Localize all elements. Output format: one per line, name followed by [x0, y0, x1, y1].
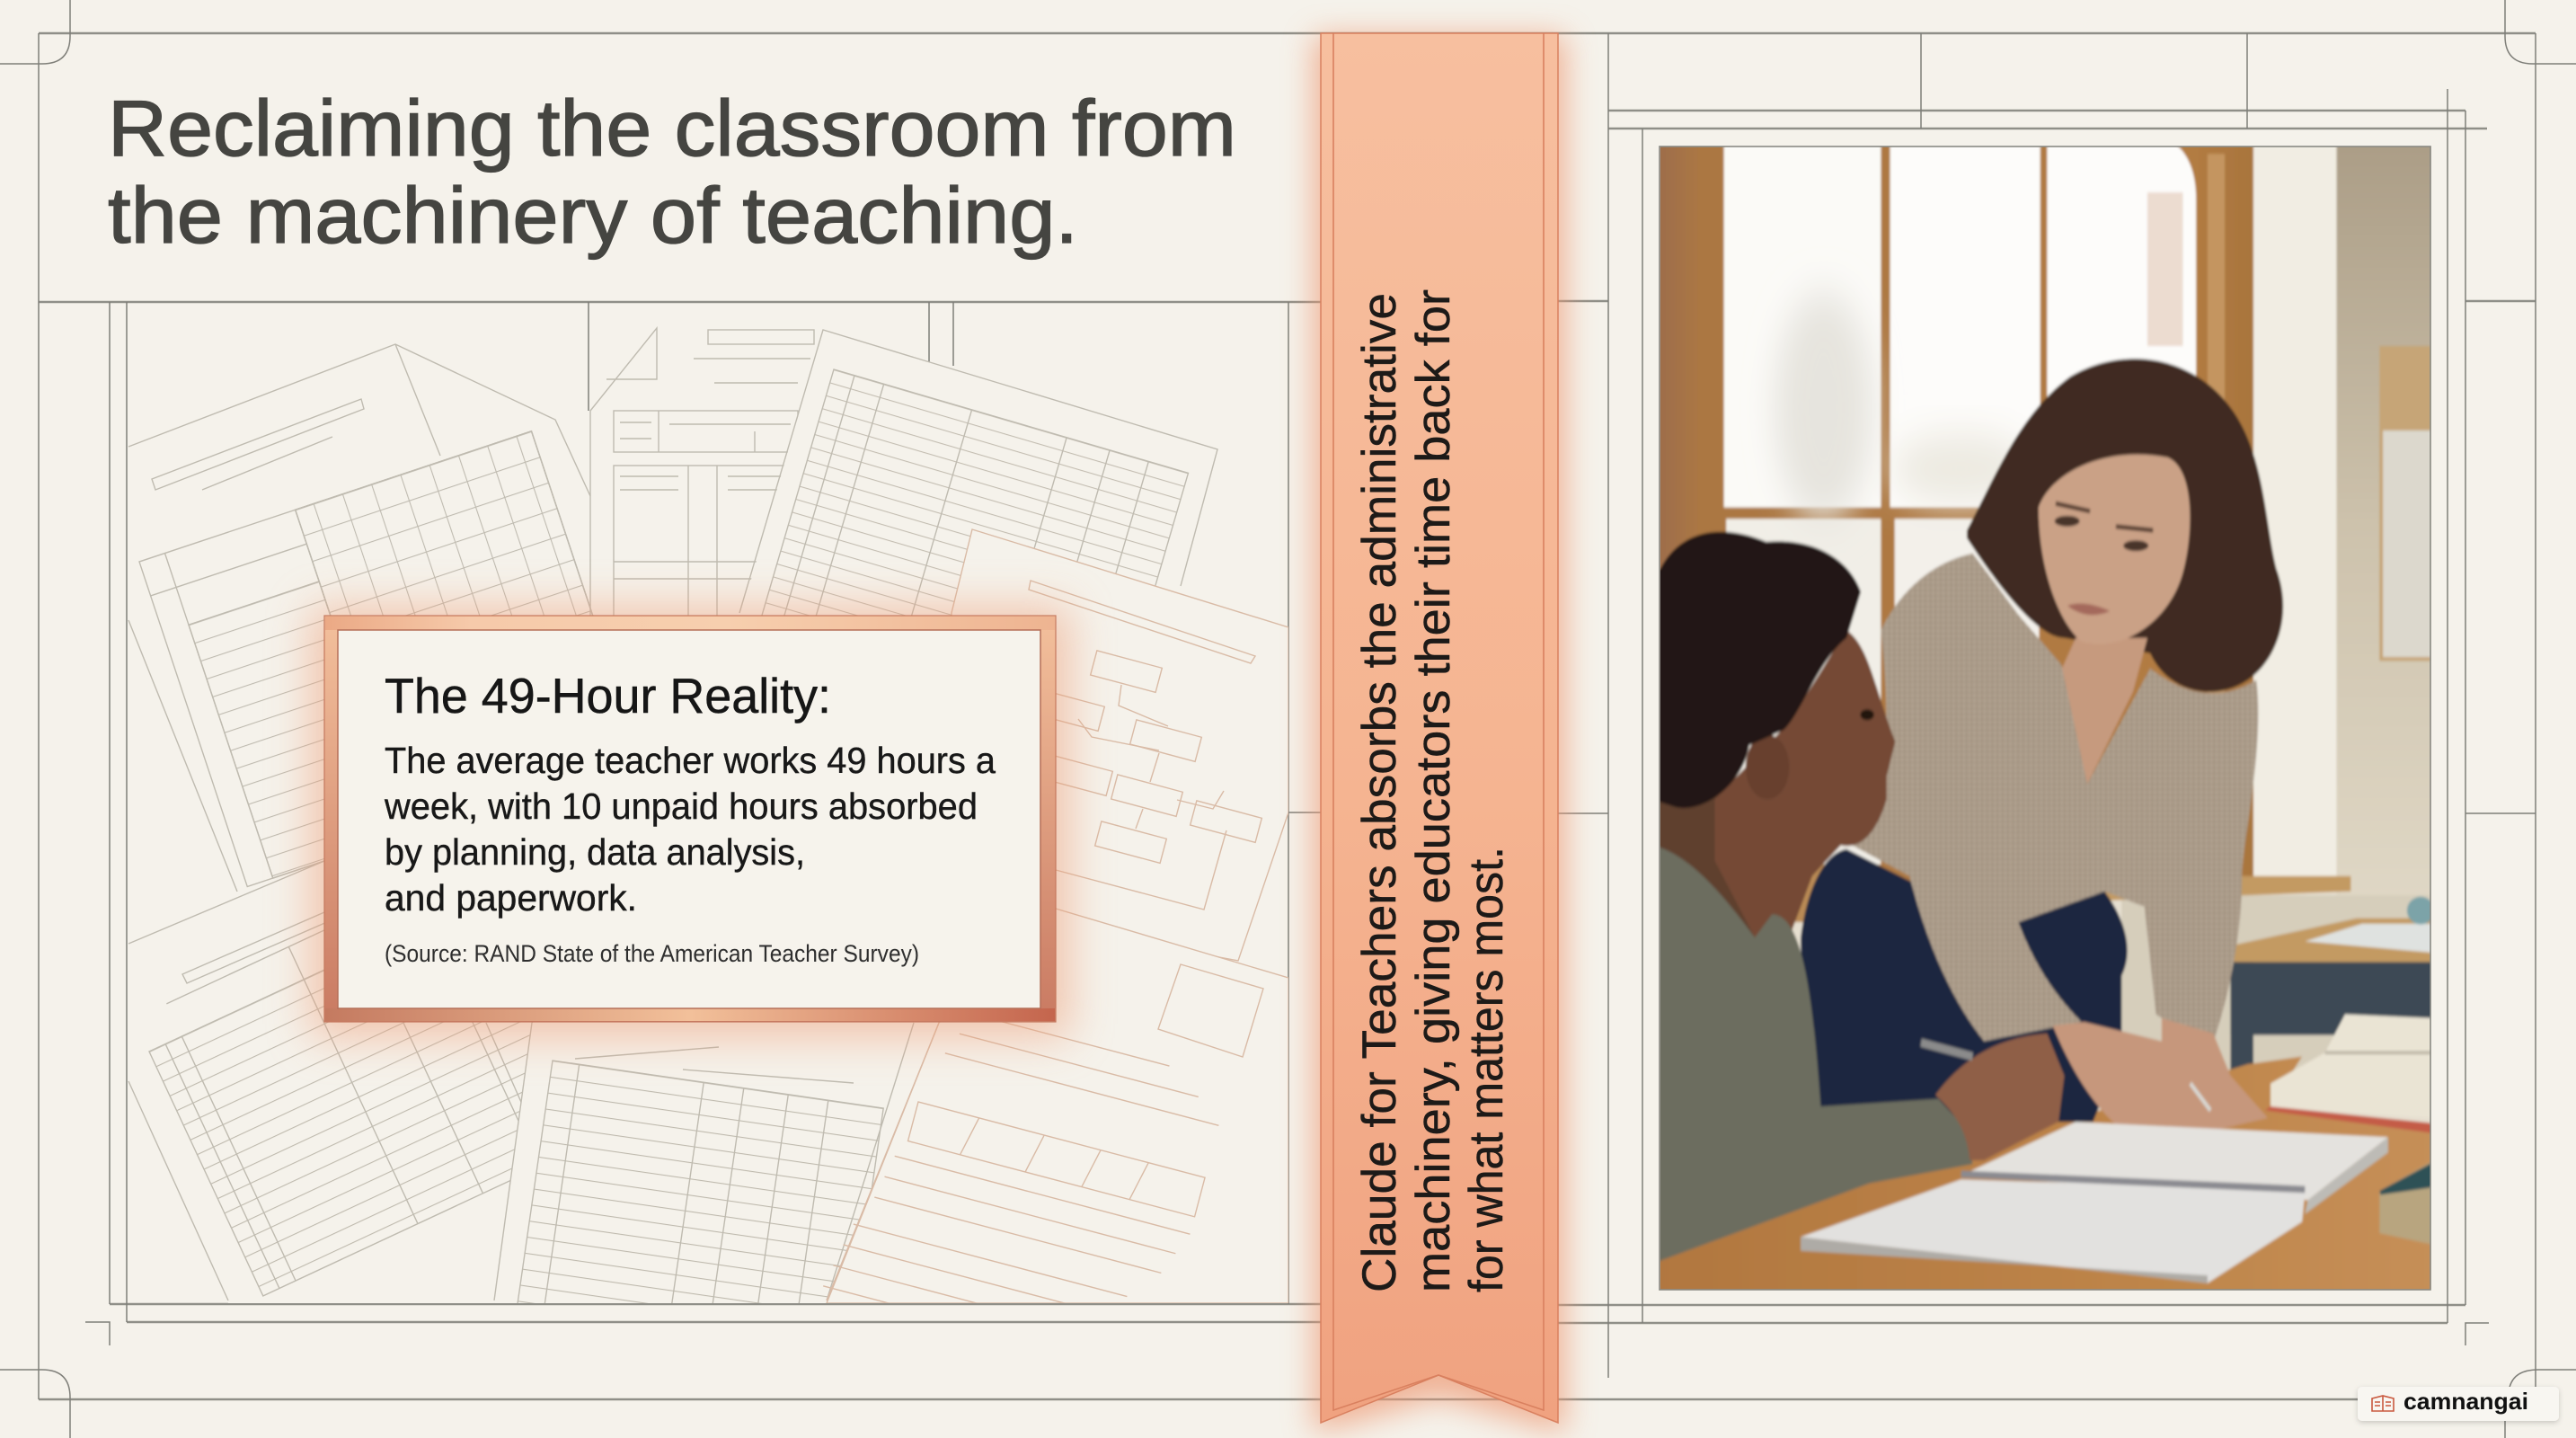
- photo teacher: [1801, 359, 2283, 1130]
- panel: overlapping paperwork forms: [128, 328, 1288, 1373]
- form: top-centre folded sheet: [590, 328, 814, 620]
- photo background desk and sill: [1781, 865, 2435, 1072]
- title: Reclaiming the classroom from: [108, 84, 1236, 173]
- photo: teacher helping a student at a desk: [1651, 138, 2437, 1299]
- photo open book: [2265, 1015, 2434, 1245]
- photo table top: [1651, 1057, 2434, 1299]
- callout inner card: [338, 630, 1040, 1008]
- ribbon message: Claude for Teachers absorbs the administrative: [1353, 293, 1406, 1292]
- photo background wall: [1792, 146, 2431, 1125]
- callout body text: by planning, data analysis,: [385, 831, 805, 873]
- ribbon message: for what matters most.: [1460, 847, 1513, 1292]
- form: bottom-right sheet: [823, 908, 1288, 1303]
- callout body text: [384, 740, 996, 919]
- ribbon inner lines: [1333, 33, 1544, 1410]
- callout body text: The average teacher works 49 hours a: [385, 740, 996, 781]
- photo notebook: [1801, 1122, 2388, 1283]
- badge label: camnangai: [2403, 1388, 2528, 1415]
- title: the machinery of teaching.: [108, 171, 1078, 260]
- callout heading: The 49-Hour Reality:: [385, 668, 831, 723]
- photo student: [1651, 532, 2064, 1264]
- ribbon glow: [1314, 36, 1565, 1434]
- form: bottom-centre table sheet: [493, 1023, 915, 1303]
- callout copper frame: [324, 616, 1056, 1022]
- ribbon body: [1321, 33, 1558, 1423]
- callout body text: week, with 10 unpaid hours absorbed: [384, 786, 978, 827]
- form: right flowchart sheet: [952, 529, 1288, 961]
- ribbon message: machinery, giving educators their time back for: [1407, 289, 1460, 1292]
- photo border: [1660, 146, 2430, 1290]
- ribbon banner: [1314, 33, 1565, 1434]
- form: bottom-left numbered sheet: [128, 863, 533, 1303]
- photo window: [1651, 138, 2253, 883]
- callout: the 49-hour reality: [310, 607, 1070, 1038]
- photo bulletin board: [2379, 346, 2435, 661]
- form: top-left grid sheet: [128, 344, 640, 892]
- callout source: (Source: RAND State of the American Teacher Survey): [385, 940, 919, 967]
- badge: camnangai: [2358, 1387, 2559, 1421]
- callout glow: [310, 607, 1070, 1038]
- title: [108, 84, 1236, 260]
- ribbon message: [1353, 289, 1513, 1292]
- form: top-right table sheet: [739, 329, 1218, 615]
- callout body text: and paperwork.: [385, 877, 637, 919]
- icon: book: [2372, 1396, 2394, 1411]
